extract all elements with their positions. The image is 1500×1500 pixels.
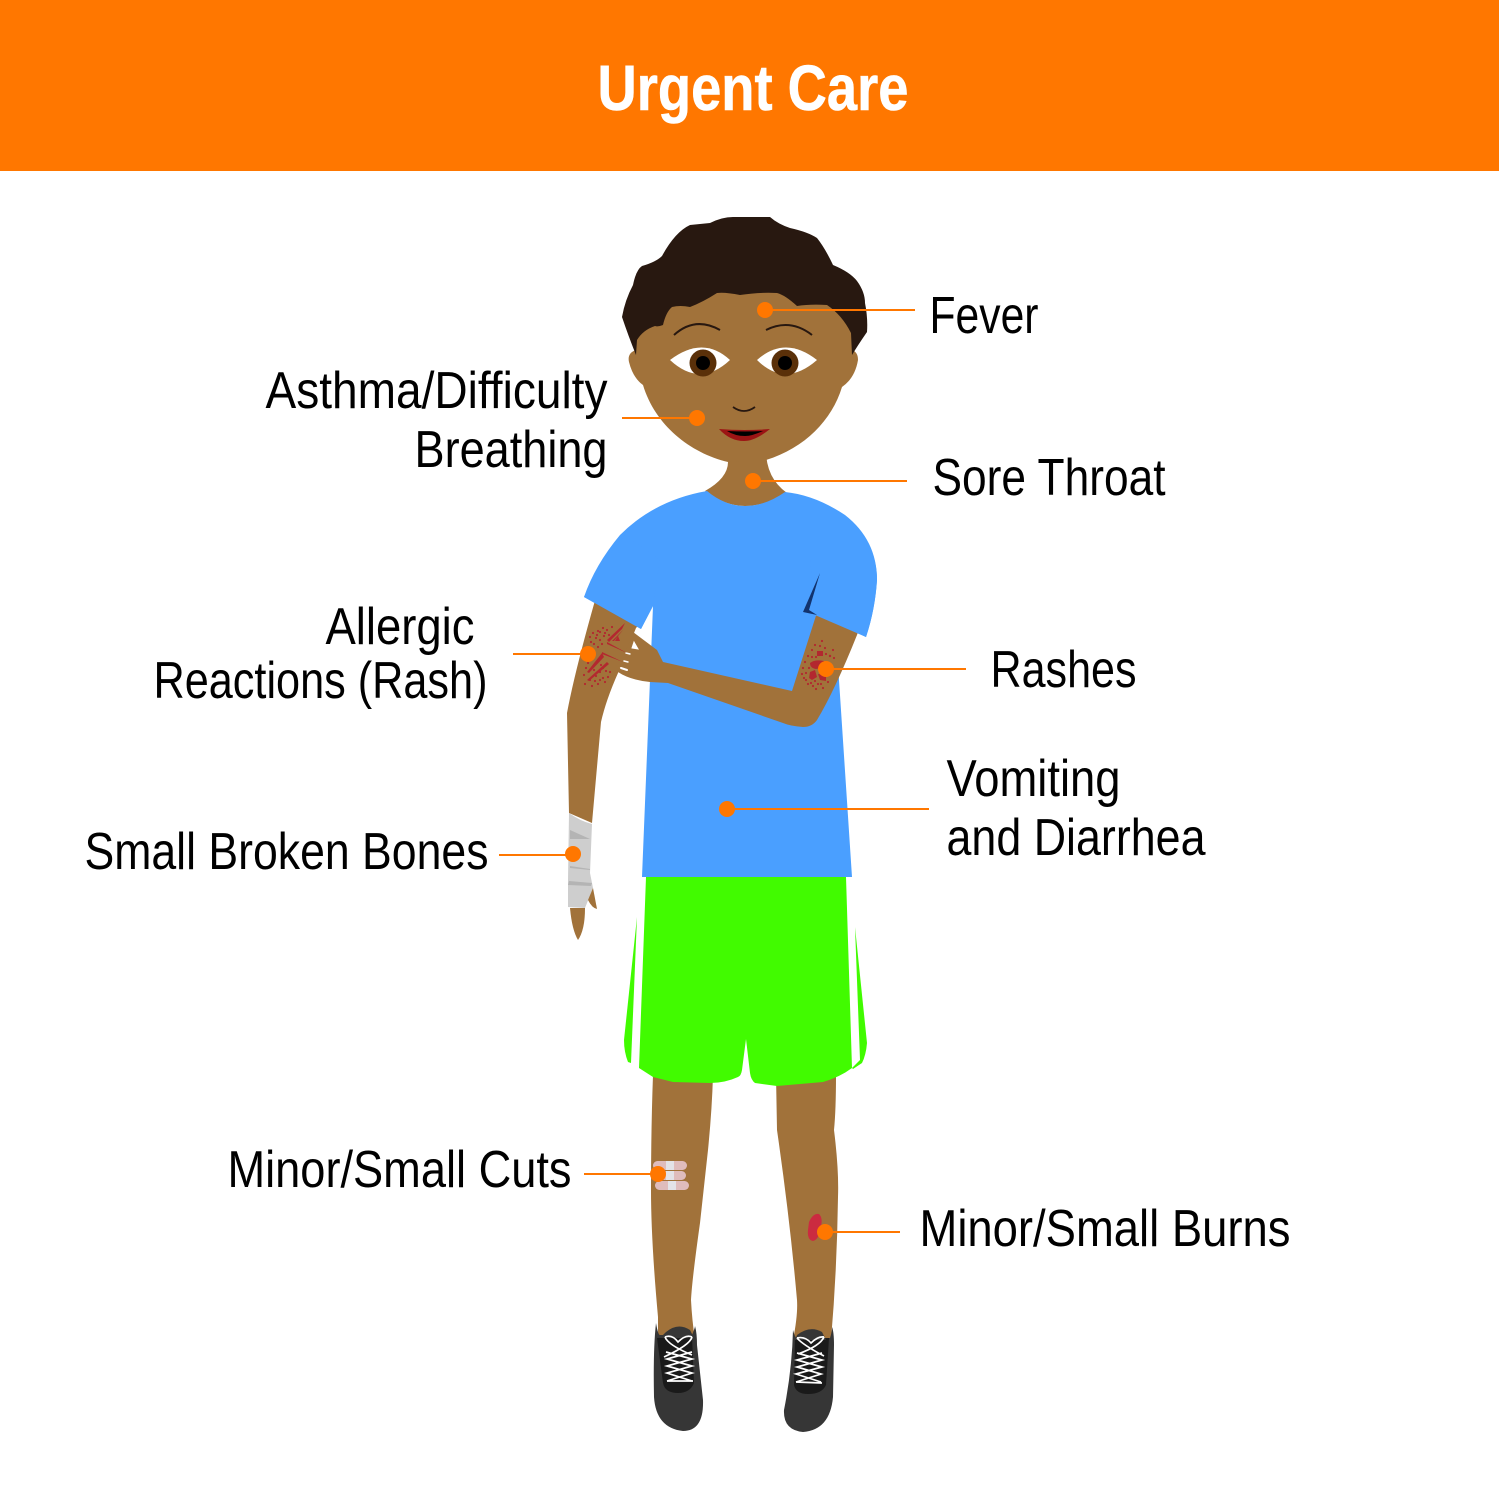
sleeve fold xyxy=(803,573,820,615)
illustration: child figure xyxy=(567,217,877,1432)
icon: wrist bandage xyxy=(568,813,593,908)
hand below bandage xyxy=(570,888,597,940)
mouth xyxy=(719,429,770,441)
face xyxy=(629,280,858,462)
legs xyxy=(651,1075,838,1340)
eyebrows xyxy=(674,324,720,335)
callout: small broken bones: Small Broken Bones xyxy=(84,823,488,881)
callout: vomiting and diarrhea xyxy=(719,750,1206,867)
callout: asthma xyxy=(266,362,705,479)
shorts xyxy=(624,877,867,1086)
left shoe xyxy=(654,1323,703,1431)
icon: bandages on shin xyxy=(653,1161,689,1190)
callout: vomiting and diarrhea: Vomiting xyxy=(946,750,1120,808)
title: Urgent Care xyxy=(598,52,908,124)
callout: sore throat: Sore Throat xyxy=(932,449,1166,507)
icon: rash on far arm xyxy=(583,623,627,687)
callout: allergic reactions: Reactions (Rash) xyxy=(154,652,488,710)
near arm and hand xyxy=(602,603,861,727)
callout: allergic reactions xyxy=(154,598,596,710)
neck xyxy=(705,450,787,506)
eyes xyxy=(670,348,817,376)
icon: burn on leg xyxy=(808,1214,822,1241)
callout: rashes: Rashes xyxy=(990,641,1136,699)
header banner xyxy=(0,0,1499,171)
callout: fever xyxy=(757,287,1038,345)
head xyxy=(622,217,867,462)
nose xyxy=(733,407,755,411)
t-shirt xyxy=(584,491,877,877)
icon: rash on near arm xyxy=(801,640,835,690)
sleeves over arms xyxy=(584,525,877,637)
callout: asthma: Asthma/Difficulty xyxy=(266,362,608,420)
hair xyxy=(622,217,867,355)
callout: fever: Fever xyxy=(930,287,1038,345)
right shoe xyxy=(784,1327,834,1432)
far arm xyxy=(567,590,645,823)
callout: sore throat xyxy=(745,449,1166,507)
callout: asthma: Breathing xyxy=(414,421,608,479)
gap between fingers xyxy=(621,642,638,670)
callout: minor cuts: Minor/Small Cuts xyxy=(228,1141,572,1199)
callout: minor burns: Minor/Small Burns xyxy=(920,1200,1290,1258)
callout: vomiting and diarrhea: and Diarrhea xyxy=(946,809,1206,867)
callout: rashes xyxy=(818,641,1136,699)
callout: allergic reactions: Allergic xyxy=(326,598,474,656)
